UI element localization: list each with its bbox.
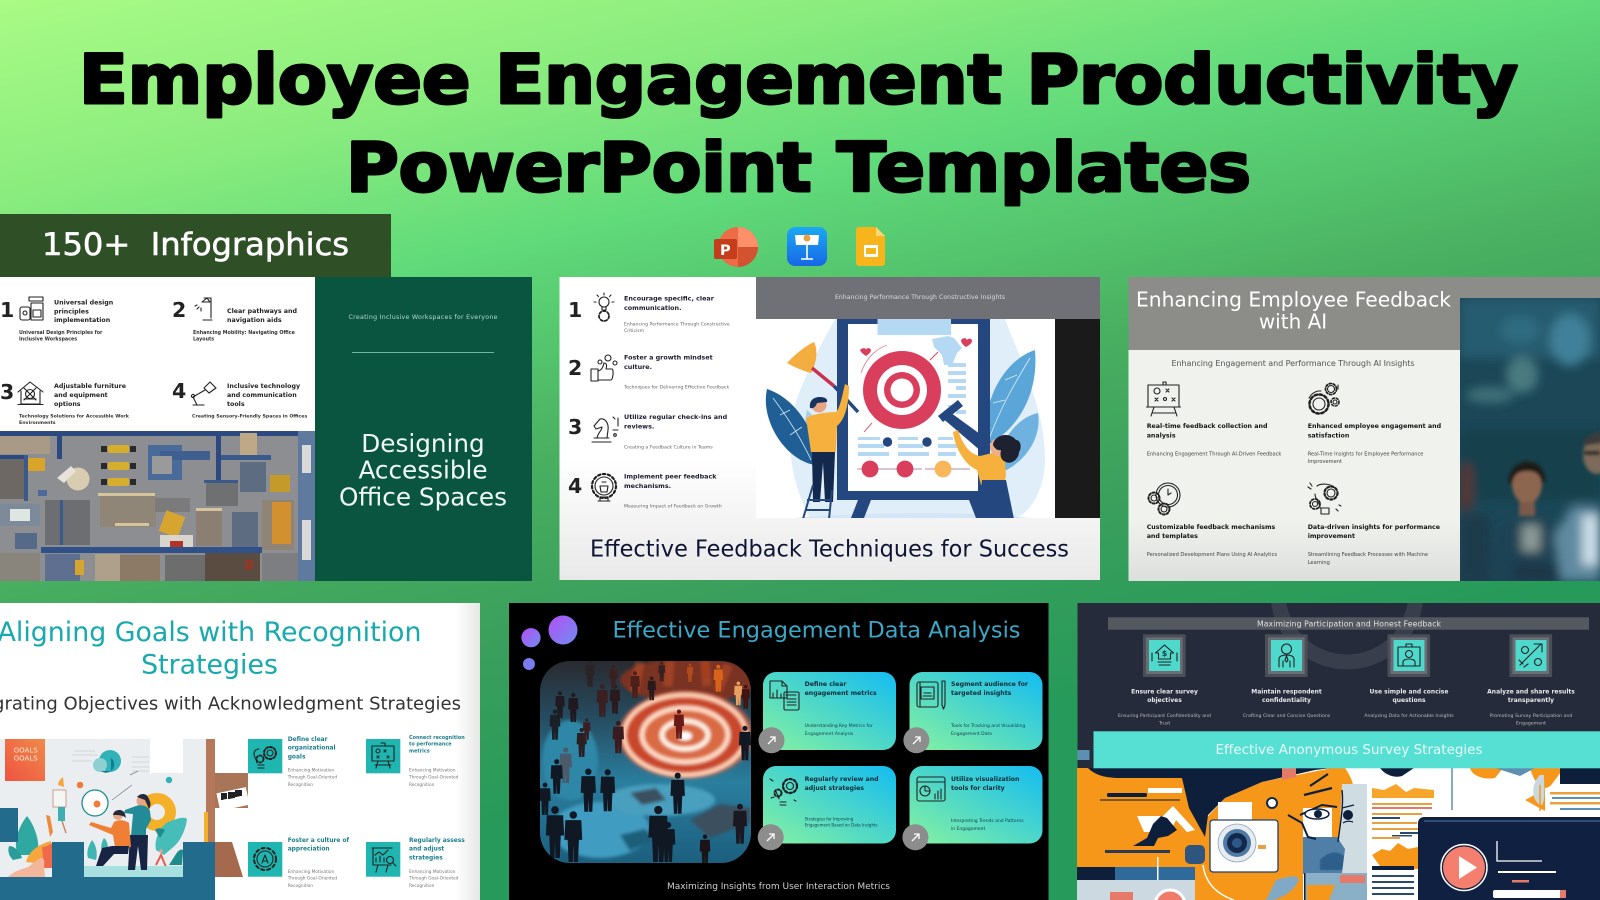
card: utilize visualization: tools for clarity: [951, 785, 1005, 792]
card: regularly review: Regularly review and: [805, 776, 879, 783]
plunger tool: [787, 342, 858, 412]
list item 1: 1: [0, 298, 14, 322]
card: define clear engagement metrics: Engagement Analysis: [805, 731, 854, 737]
crowd silhouettes: [539, 660, 751, 865]
step 1: 1: [568, 298, 582, 322]
recognition item 4: Recognition: [409, 883, 435, 889]
survey tip 4: Engagement: [1516, 721, 1546, 727]
survey tip 1: Ensuring Participant Confidentiality and: [1118, 713, 1211, 719]
card: define clear engagement metrics: Define clear: [805, 681, 847, 688]
card: segment audience: Segment audience for: [951, 681, 1029, 688]
recognition item 2: Through Goal-Oriented: [408, 775, 459, 781]
survey tip 4: transparently: [1508, 697, 1554, 704]
feature 2: Improvement: [1308, 459, 1342, 465]
recognition item 2: Enhancing Motivation: [409, 768, 456, 774]
list item 4: [172, 379, 307, 420]
step 2: 2: [568, 356, 582, 380]
decorative purple circles: [521, 616, 578, 670]
feature 3: and templates: [1147, 533, 1198, 540]
recognition item 3: [248, 838, 350, 889]
teal title bar: Effective Anonymous Survey Strategies: [1216, 743, 1483, 758]
survey tip 4: [1487, 634, 1575, 727]
board lines: [858, 363, 966, 456]
survey tip 3: Use simple and concise: [1370, 688, 1448, 696]
recognition item 4: Regularly assess: [409, 838, 465, 844]
slide title: Effective Feedback Techniques for Success: [590, 534, 1069, 562]
illustration: goals team: [0, 739, 250, 900]
leaf left: [766, 389, 812, 464]
recognition item 2: metrics: [409, 748, 430, 754]
survey tip 1: [1118, 634, 1211, 727]
card: regularly review: adjust strategies: [805, 785, 864, 792]
step 4: mechanisms.: [624, 482, 671, 490]
survey tip 3: questions: [1392, 697, 1426, 704]
recognition item 1: Through Goal-Oriented: [287, 775, 337, 781]
survey tip 3: Analyzing Data for Actionable Insights: [1364, 713, 1454, 719]
hanging figure: [46, 777, 66, 837]
card: utilize visualization: Utilize visualization: [951, 776, 1019, 783]
header band: [756, 277, 1100, 319]
panel: Enhancing Employee Feedback with AI: [1128, 277, 1600, 585]
list item 2: navigation aids: [227, 317, 282, 324]
feature 4: improvement: [1308, 533, 1355, 540]
panel: Aligning Goals with Recognition Strategies: [0, 603, 480, 900]
recognition item 3: Recognition: [288, 883, 313, 889]
list item 3: 3: [0, 380, 14, 404]
lower left: [1077, 867, 1115, 880]
feature 4: [1308, 483, 1440, 566]
feature 1: [1146, 382, 1281, 458]
step 3: Creating a Feedback Culture in Teams: [624, 444, 713, 450]
list item 3: Adjustable furniture: [54, 383, 126, 390]
list item 2: Clear pathways and: [227, 308, 297, 315]
list item 4: 4: [172, 379, 186, 403]
documents: [1372, 768, 1600, 895]
list item 1: [0, 297, 113, 343]
feature 4: Data-driven insights for performance: [1308, 524, 1440, 531]
step 3: [568, 413, 728, 450]
left hint strip: [1078, 750, 1090, 760]
panel: Designing Accessible Office Spaces: [0, 277, 532, 581]
feature 2: Enhanced employee engagement and: [1308, 423, 1441, 430]
feature 3: Customizable feedback mechanisms: [1147, 524, 1276, 531]
recognition item 1: [248, 737, 337, 788]
image: office floor plan: [0, 431, 315, 581]
feature 2: [1308, 384, 1441, 465]
floor: [84, 866, 183, 877]
step 3: Utilize regular check-ins and: [624, 413, 728, 421]
badge: 150+ Infographics: [0, 214, 391, 277]
list item 2: Enhancing Mobility: Navigating Office: [193, 330, 296, 336]
panel: Effective Feedback Techniques: [560, 277, 1100, 580]
woman standing: [124, 794, 151, 870]
card: utilize visualization: [902, 766, 1042, 850]
card: utilize visualization: Interpreting Trends and Patterns: [951, 818, 1024, 824]
feature 3: Personalized Development Plans Using AI Analytics: [1147, 552, 1277, 558]
icon: Google Slides: [856, 227, 885, 266]
woman: [953, 430, 1021, 519]
list item 2: Layouts: [193, 337, 214, 343]
board: [837, 319, 990, 518]
recognition item 3: Enhancing Motivation: [288, 869, 334, 875]
step 2: Foster a growth mindset: [624, 354, 713, 362]
survey tip 3: [1364, 634, 1454, 719]
feature 1: Enhancing Engagement Through AI-Driven Feedback: [1147, 452, 1281, 458]
step 1: Criticism: [624, 328, 645, 334]
recognition item 4: and adjust: [409, 847, 444, 853]
card: define clear engagement metrics: Understanding Key Metrics for: [805, 723, 873, 729]
list item 4: Inclusive technology: [227, 383, 300, 390]
illustration: team placing target on board: [756, 319, 1055, 519]
photo: crowd around glowing target: [539, 658, 760, 865]
leaf right top: [990, 350, 1036, 444]
card: utilize visualization: in Engagement: [951, 826, 985, 832]
slide title: Aligning Goals with Recognition: [0, 617, 421, 648]
header: with AI: [1259, 310, 1327, 334]
panel: Effective Anonymous Survey Strategies: [1077, 603, 1600, 900]
header band: Enhancing Performance Through Constructive Insights: [835, 294, 1005, 301]
recognition item 4: Through Goal-Oriented: [408, 876, 459, 882]
header: Enhancing Employee Feedback: [1136, 288, 1451, 312]
target: [860, 336, 972, 432]
step 3: 3: [568, 415, 582, 439]
icon: PowerPoint: [714, 227, 758, 267]
step 1: Encourage specific, clear: [624, 294, 715, 302]
feature 4: Learning: [1308, 560, 1330, 566]
list item 3: and equipment: [54, 392, 108, 399]
slide title: [339, 429, 507, 512]
step 4: Implement peer feedback: [624, 472, 717, 480]
recognition item 2: [366, 735, 465, 788]
icon: Keynote: [787, 227, 827, 266]
feature 2: Real-Time Insights for Employee Performance: [1308, 452, 1423, 458]
feature 1: analysis: [1147, 432, 1176, 440]
list item 2: [172, 298, 297, 343]
title: Employee Engagement Productivity: [79, 41, 1518, 120]
leaf right lower: [1004, 413, 1039, 470]
recognition item 1: Enhancing Motivation: [288, 768, 334, 774]
card: regularly review: Strategies for Improving: [805, 816, 854, 822]
panel: Effective Engagement Data Analysis: [509, 603, 1048, 900]
list item 3: Technology Solutions for Accessible Work: [19, 414, 130, 420]
recognition item 4: strategies: [409, 855, 443, 861]
man on ladder: [803, 384, 849, 519]
footer caption: Maximizing Insights from User Interaction Metrics: [667, 882, 890, 892]
title: PowerPoint Templates: [346, 129, 1251, 208]
survey tip 2: confidentiality: [1262, 697, 1311, 704]
survey tip 2: Crafting Clear and Concise Questions: [1243, 713, 1331, 719]
recognition item 2: to performance: [409, 742, 452, 748]
survey tip 4: Analyze and share results: [1487, 688, 1575, 696]
hand: [8, 858, 45, 877]
recognition item 3: Foster a culture of: [288, 838, 350, 844]
slide title: Office Spaces: [339, 482, 507, 512]
step 3: reviews.: [624, 422, 654, 430]
slide title: Accessible: [358, 456, 488, 485]
step 4: 4: [568, 474, 582, 498]
list item 4: Creating Sensory-Friendly Spaces in Offices: [192, 414, 307, 420]
list item 2: 2: [172, 298, 186, 322]
list item 1: Inclusive Workspaces: [19, 337, 77, 343]
illustration: camera, face, video: [1077, 768, 1600, 900]
feature 2: satisfaction: [1308, 432, 1349, 440]
icon: PowerPoint: P: [720, 243, 731, 259]
list item 3: [0, 380, 130, 426]
black block: [1055, 319, 1100, 518]
card: define clear engagement metrics: [758, 672, 896, 753]
recognition item 4: [366, 838, 465, 889]
recognition item 2: Recognition: [409, 782, 435, 788]
book: GOALS: [14, 754, 38, 762]
donut chart: [144, 798, 170, 826]
step 2: [568, 354, 729, 391]
step 2: Techniques for Delivering Effective Feedback: [623, 385, 729, 391]
list item 1: principles: [54, 308, 89, 315]
recognition item 1: Recognition: [288, 782, 313, 788]
survey tip 1: $: [1162, 649, 1168, 658]
survey tip 1: Trust: [1158, 721, 1170, 727]
card: segment audience: Engagement Data: [951, 731, 992, 737]
list item 3: options: [54, 401, 81, 408]
step 1: Enhancing Performance Through Constructive: [624, 322, 730, 328]
survey tip 1: Ensure clear survey: [1131, 688, 1198, 696]
survey tip 2: Maintain respondent: [1251, 688, 1322, 696]
book: GOALS: [14, 746, 38, 754]
step 4: [568, 472, 722, 509]
face details: [1303, 808, 1332, 837]
recognition item 1: goals: [288, 754, 306, 760]
feature 4: Streamlining Feedback Processes with Machine: [1308, 552, 1428, 558]
list item 1: implementation: [54, 317, 110, 324]
teal steps: [0, 808, 215, 900]
recognition item 1: Define clear: [288, 737, 328, 743]
man seated: [89, 810, 131, 866]
header bar: Maximizing Participation and Honest Feedback: [1257, 620, 1442, 628]
list item 1: Universal Design Principles for: [19, 330, 103, 336]
list item 4: and communication: [227, 392, 297, 399]
step 1: communication.: [624, 304, 682, 312]
plant right: [156, 818, 187, 855]
slide title: Strategies: [141, 650, 278, 681]
survey tip 2: [1243, 634, 1331, 719]
hat: [1088, 768, 1332, 837]
list item 3: Environments: [19, 420, 56, 426]
survey tip 4: Promoting Survey Participation and: [1490, 713, 1572, 719]
slide title: Effective Engagement Data Analysis: [612, 618, 1020, 644]
card: regularly review: [758, 766, 896, 850]
slide title: Designing: [361, 429, 485, 458]
teal title bar: [1094, 731, 1600, 768]
recognition item 3: Through Goal-Oriented: [287, 876, 337, 882]
plants left: [16, 816, 38, 855]
recognition item 3: appreciation: [288, 847, 330, 853]
list item 1: Universal design: [54, 300, 113, 306]
survey tip 1: objectives: [1147, 697, 1182, 704]
left details: [1107, 793, 1147, 797]
title: [79, 41, 1518, 208]
slide title: [0, 617, 421, 681]
card: define clear engagement metrics: engagement metrics: [805, 690, 877, 697]
card: segment audience: targeted insights: [951, 690, 1012, 697]
step 1: [568, 293, 730, 334]
subtitle text: Creating Inclusive Workspaces for Everyone: [348, 314, 498, 321]
card: segment audience: Tools for Tracking and Visualizing: [950, 723, 1025, 729]
hammer tool: [938, 400, 991, 452]
header: [1128, 277, 1600, 350]
feature 3: [1147, 483, 1277, 558]
card: segment audience: [903, 672, 1042, 753]
step 2: culture.: [624, 363, 652, 371]
header bar: [1108, 617, 1589, 630]
badge: 150+ Infographics: 150+ Infographics: [42, 227, 349, 263]
card: regularly review: Engagement Based on Data Insights: [805, 822, 878, 828]
recognition item 2: Connect recognition: [409, 735, 465, 741]
subtitle: Enhancing Engagement and Performance Through AI Insights: [1172, 359, 1414, 368]
step 4: Measuring Impact of Feedback on Growth: [624, 503, 722, 509]
camera: [1210, 798, 1278, 872]
photo: blurred team: [1460, 298, 1600, 585]
recognition item 4: Enhancing Motivation: [409, 869, 456, 875]
orange background and face: [1077, 768, 1207, 868]
feature 1: Real-time feedback collection and: [1147, 423, 1267, 430]
recognition item 1: organizational: [288, 746, 336, 752]
video player: [1418, 817, 1600, 900]
book: [5, 739, 45, 781]
list item 4: tools: [227, 401, 245, 408]
